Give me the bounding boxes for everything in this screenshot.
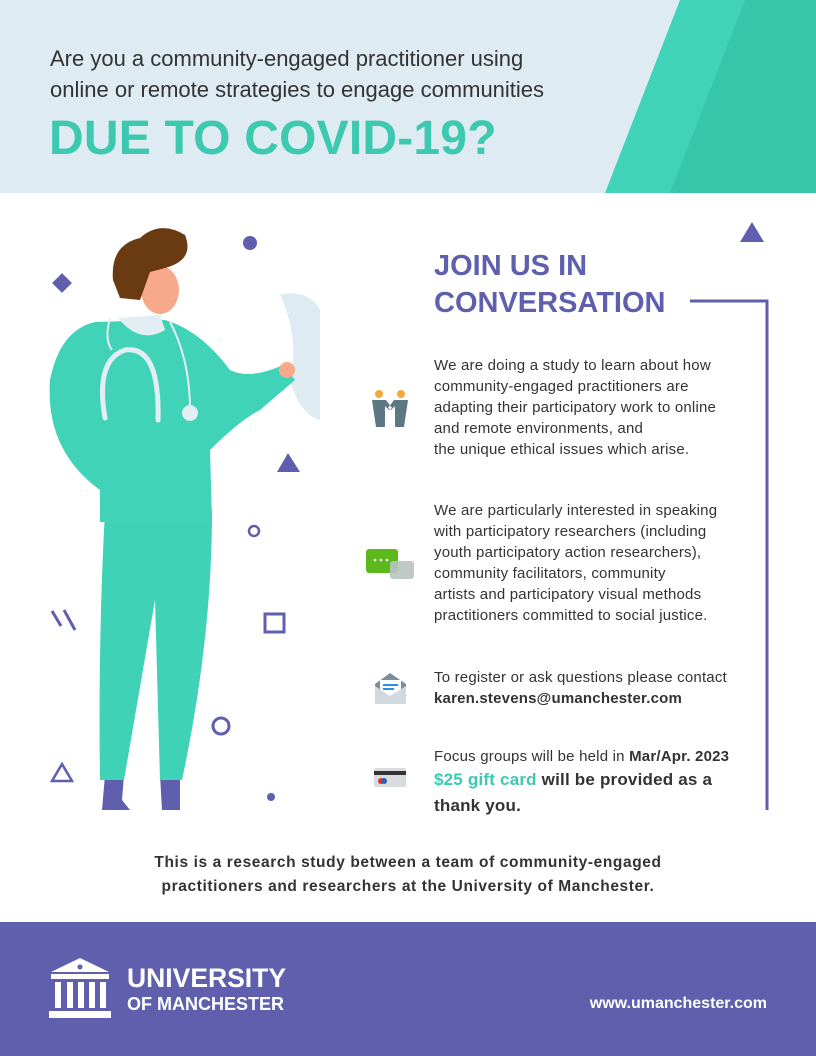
decorative triangle top right [740,222,764,242]
university name: OF MANCHESTER [127,994,284,1014]
website: www.umanchester.com [590,995,767,1012]
university name: UNIVERSITY [127,963,286,993]
text: contact: To register or ask questions please contact [434,669,727,686]
header question: Are you a community-engaged practitioner using [50,46,523,71]
text: study description: adapting their participatory work to online [434,399,716,416]
text: study description [434,357,716,458]
text: focus groups and gift card: $25 gift card will be provided as a [434,770,712,789]
hair [113,228,188,300]
icon: university building [49,958,111,1018]
pants [100,510,212,780]
text: contact: karen.stevens@umanchester.com [434,690,682,707]
header question [50,46,544,102]
bracket line [690,300,768,810]
text: target participants: We are particularly interested in speaking [434,502,717,519]
text: target participants [434,502,717,624]
text: study description: We are doing a study to learn about how [434,357,711,374]
text: target participants: artists and participatory visual methods [434,586,701,603]
stethoscope [102,350,158,420]
footnote: This is a research study between a team of community-engaged [154,854,662,871]
text: study description: the unique ethical issues which arise. [434,441,689,458]
header question: online or remote strategies to engage communities [50,77,544,102]
text: focus groups and gift card: Focus groups will be held in Mar/Apr. 2023 [434,748,729,765]
join heading [434,250,665,319]
icon: envelope [375,673,406,704]
header band [0,0,816,193]
neck/collar [118,315,165,335]
icon: handshake people [372,390,408,427]
join heading: JOIN US IN [434,250,587,282]
join heading: CONVERSATION [434,287,665,319]
footnote: practitioners and researchers at the University of Manchester. [162,878,654,895]
text: focus groups and gift card [434,748,729,815]
text: contact [434,669,727,707]
text: focus groups and gift card: thank you. [434,796,521,815]
decorative teal shape [605,0,816,193]
torso [50,320,295,522]
text: target participants: youth participatory action researchers), [434,544,701,561]
icon: gift card [374,768,406,787]
decorative shapes [52,236,300,801]
hand [279,362,295,378]
text: target participants: community facilitators, community [434,565,666,582]
footnote [154,854,662,895]
doctor illustration [50,228,320,810]
header title: DUE TO COVID-19? [49,112,497,165]
feet [102,775,180,810]
text: target participants: practitioners committed to social justice. [434,607,708,624]
text: study description: and remote environments, and [434,420,643,437]
face [141,266,179,314]
paper [280,293,320,420]
text: target participants: with participatory researchers (including [434,523,706,540]
icon: chat bubbles [366,549,414,579]
text: study description: community-engaged practitioners are [434,378,689,395]
university name [127,963,286,1014]
footer [0,922,816,1056]
